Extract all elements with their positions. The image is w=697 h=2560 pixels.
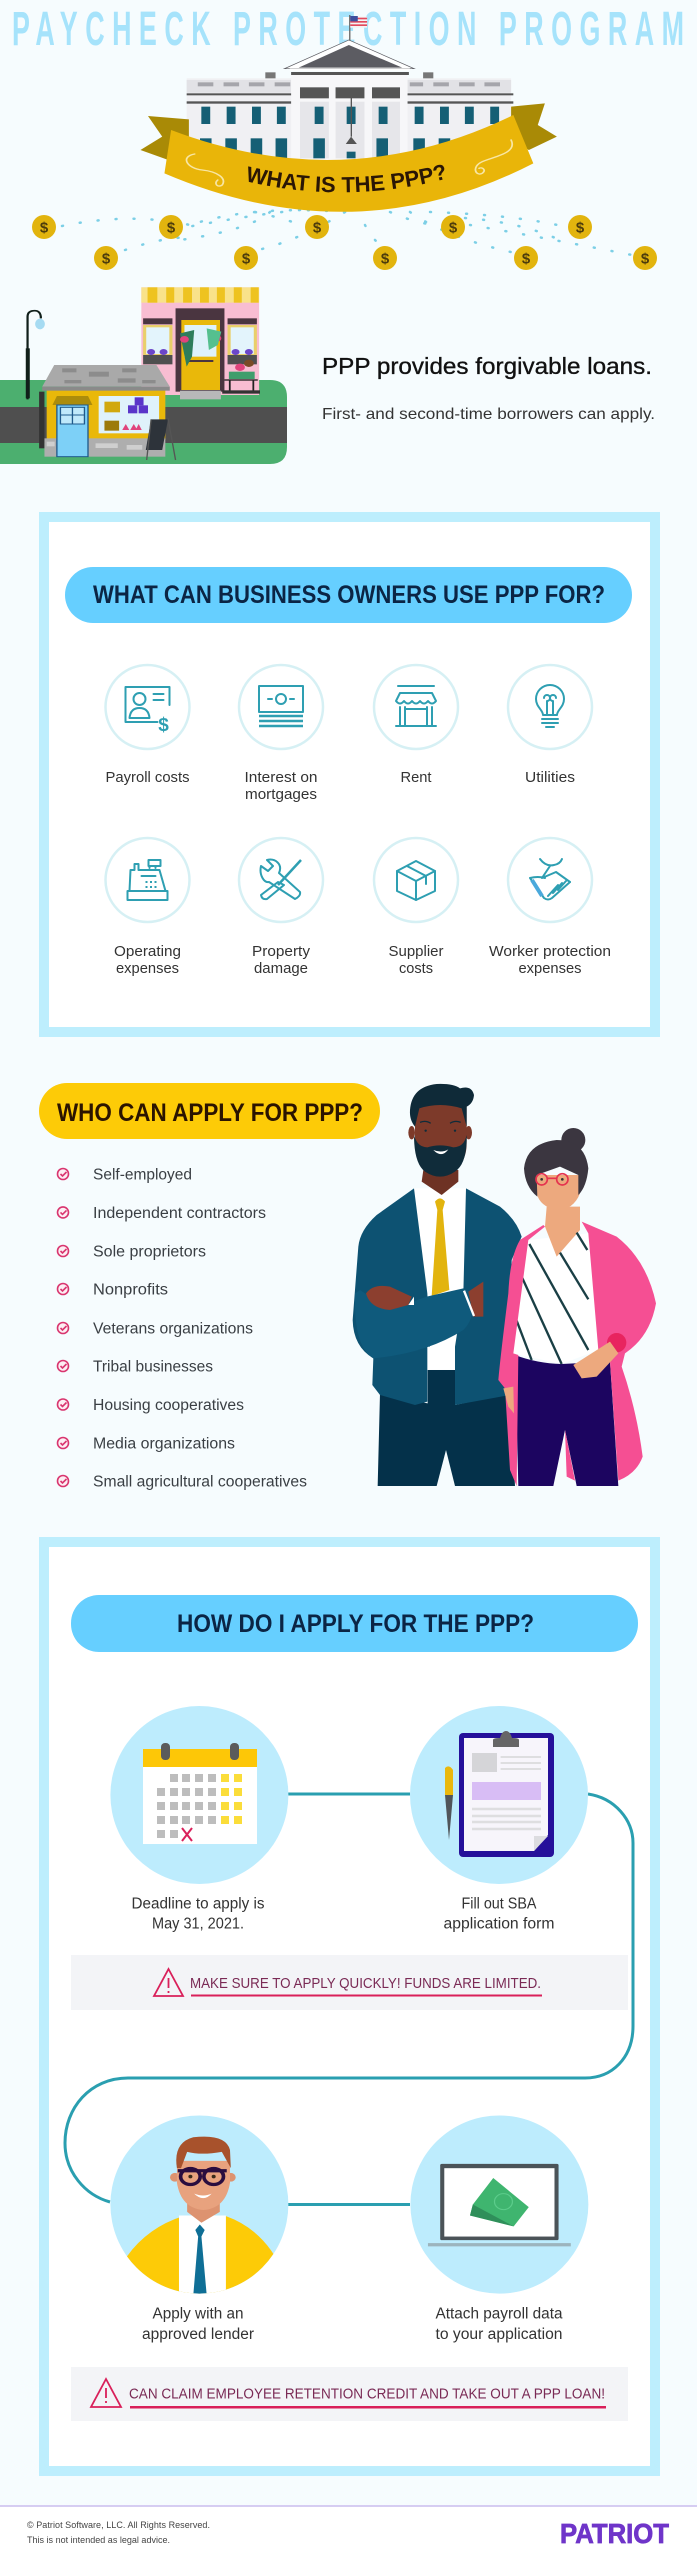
label: supplier costs: costs: [399, 961, 433, 977]
banner: What is the PPP?: WHAT IS THE PPP?: [248, 164, 444, 192]
label: worker protection expenses: expenses: [518, 961, 582, 977]
intro text: [322, 353, 655, 423]
icon: payroll costs: $: [158, 715, 169, 736]
coins: $: [522, 250, 531, 268]
list item: Small agricultural cooperatives: [93, 1474, 307, 1490]
heading pill: who can apply: WHO CAN APPLY FOR PPP?: [57, 1099, 363, 1127]
label: operating expenses: [114, 944, 181, 977]
flow connector lines: [65, 1794, 633, 2204]
icon: warning triangle: [154, 1969, 183, 1996]
label: approved lender: approved lender: [142, 2326, 254, 2343]
illustration: storefronts: [0, 287, 287, 464]
disclaimer: This is not intended as legal advice.: [27, 2535, 170, 2545]
icon: interest on mortgages: [239, 665, 323, 749]
label: worker protection expenses: Worker protection: [489, 944, 611, 960]
icon: utilities: [508, 665, 592, 749]
label: payroll data: [436, 2306, 563, 2343]
checklist: eligible applicants: [58, 1166, 307, 1490]
coins: $: [242, 250, 251, 268]
label: application form: [444, 1896, 554, 1932]
label: operating expenses: expenses: [116, 961, 179, 977]
label: worker protection expenses: [489, 944, 611, 977]
heading pill: [71, 1595, 638, 1652]
label: property damage: [252, 944, 311, 977]
label: deadline: May 31, 2021.: [152, 1916, 244, 1932]
logo: Patriot: PATRIOT: [560, 2518, 669, 2549]
callout: employee retention credit: [71, 2367, 628, 2421]
label: application form: application form: [444, 1916, 554, 1932]
coins: $: [449, 220, 458, 236]
list item: Self-employed: [93, 1166, 192, 1184]
heading pill: HOW DO I APPLY FOR THE PPP?: [177, 1610, 534, 1638]
coins: $: [381, 250, 390, 268]
step 4: payroll data: [410, 2115, 588, 2343]
coins: [32, 215, 657, 270]
list item: [58, 1282, 168, 1298]
money dots trail: [62, 210, 632, 255]
icon: supplier costs: [374, 838, 458, 922]
label: interest on mortgages: mortgages: [245, 787, 317, 803]
intro heading: PPP provides forgivable loans.: [322, 353, 652, 379]
coins: $: [167, 220, 176, 236]
heading pill: who can apply: [39, 1083, 380, 1139]
list item: Independent contractors: [93, 1205, 266, 1222]
label: payroll data: to your application: [436, 2326, 562, 2343]
banner: What is the PPP?: [140, 103, 557, 212]
step 3: approved lender: [108, 2115, 291, 2343]
label: interest on mortgages: Interest on: [244, 770, 318, 786]
man: [353, 1084, 522, 1486]
callout: employee retention credit: CAN CLAIM EMPLOYEE RETENTION CREDIT AND TAKE OUT A PPP LOAN!: [129, 2386, 605, 2402]
label: deadline: Deadline to apply is: [132, 1896, 265, 1912]
list item: Nonprofits: [93, 1282, 168, 1298]
icon: payroll costs: [106, 665, 190, 749]
icon: warning triangle: [91, 2379, 121, 2407]
list item: Housing cooperatives: [93, 1397, 244, 1414]
coins: $: [576, 220, 585, 236]
panel: what can business owners use PPP for: [44, 517, 655, 1032]
illustration: lender: [108, 2115, 291, 2295]
label: payroll costs: Payroll costs: [106, 770, 190, 786]
coins: $: [40, 220, 49, 236]
label: operating expenses: Operating: [114, 944, 181, 960]
step 1: deadline: [110, 1706, 288, 1932]
list item: Tribal businesses: [93, 1358, 213, 1376]
label: property damage: Property: [252, 944, 311, 960]
street ground: [0, 380, 287, 464]
list item: Veterans organizations: [93, 1320, 253, 1338]
label: utilities: Utilities: [525, 770, 575, 786]
label: approved lender: Apply with an: [152, 2306, 244, 2322]
label: deadline: [132, 1896, 265, 1932]
intro subtext: First- and second-time borrowers can apply.: [322, 406, 655, 423]
icon: clipboard and pen: [410, 1706, 588, 1884]
icon: property damage: [239, 838, 323, 922]
label: interest on mortgages: [244, 770, 318, 803]
label: rent: Rent: [400, 770, 432, 786]
label: property damage: damage: [254, 961, 308, 977]
illustration: White House: [187, 15, 513, 165]
list item: Media organizations: [93, 1436, 235, 1452]
footer: [0, 2505, 697, 2549]
coins: $: [641, 250, 650, 268]
icon: rent: [374, 665, 458, 749]
label: supplier costs: [388, 944, 444, 977]
list item: Sole proprietors: [93, 1244, 206, 1260]
label: supplier costs: Supplier: [388, 944, 444, 960]
illustration: business man and woman: [353, 1084, 656, 1486]
label: application form: Fill out SBA: [462, 1896, 537, 1912]
label: payroll data: Attach payroll data: [436, 2306, 563, 2322]
label: approved lender: [142, 2306, 254, 2343]
icon: operating expenses: [106, 838, 190, 922]
coins: $: [313, 220, 322, 236]
copyright: © Patriot Software, LLC. All Rights Reserved.: [27, 2520, 210, 2530]
heading pill: WHAT CAN BUSINESS OWNERS USE PPP FOR?: [93, 581, 605, 609]
icon: worker protection expenses: [508, 838, 592, 922]
callout: apply quickly: MAKE SURE TO APPLY QUICKLY! FUNDS ARE LIMITED.: [190, 1975, 541, 1992]
heading pill: [65, 567, 632, 623]
lamp post: [28, 311, 41, 399]
panel: how do I apply: [44, 1542, 655, 2471]
woman: [498, 1128, 656, 1486]
coins: $: [102, 250, 111, 268]
step 2: application form: [410, 1706, 588, 1932]
title: PAYCHECK PROTECTION PROGRAM: [12, 3, 684, 56]
illustration: laptop with money: [410, 2115, 588, 2294]
icon: calendar: [110, 1706, 288, 1884]
callout: apply quickly: [71, 1955, 628, 2010]
